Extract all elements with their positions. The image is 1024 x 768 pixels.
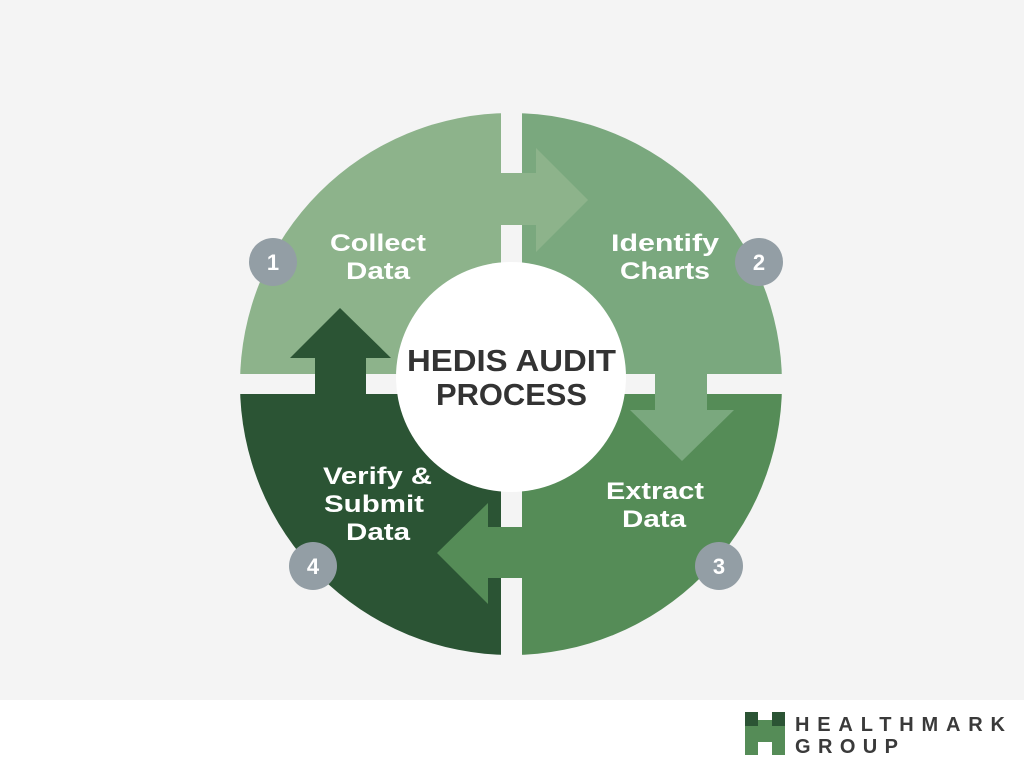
label: verify & submit: Submit bbox=[324, 491, 424, 518]
quadrant: collect data bbox=[240, 113, 511, 384]
label: verify & submit bbox=[323, 463, 432, 546]
logo: GROUP bbox=[795, 736, 898, 758]
label: identify charts: Identify bbox=[611, 230, 720, 257]
center circle bbox=[396, 262, 626, 492]
title bbox=[407, 343, 616, 412]
label: identify charts: Charts bbox=[620, 258, 710, 285]
title: HEDIS AUDIT bbox=[407, 343, 616, 378]
title: PROCESS bbox=[436, 377, 587, 412]
label: verify & submit: Verify & bbox=[323, 463, 432, 490]
label: collect data: Data bbox=[346, 258, 411, 285]
quadrant: identify charts bbox=[511, 113, 782, 384]
label: extract data bbox=[606, 478, 704, 533]
quadrant: verify & submit bbox=[240, 384, 511, 655]
quadrant: extract data bbox=[511, 384, 782, 655]
badge 2 bbox=[735, 238, 783, 286]
badge 1 bbox=[249, 238, 297, 286]
logo bbox=[745, 712, 1006, 758]
arrow: 3 to 4 bbox=[437, 503, 535, 604]
badge 4 bbox=[289, 542, 337, 590]
label: identify charts bbox=[611, 230, 720, 285]
arrow: 4 to 1 bbox=[290, 308, 391, 400]
arrow: 1 to 2 bbox=[490, 148, 588, 252]
badge 2: 2 bbox=[753, 250, 765, 275]
badge 3 bbox=[695, 542, 743, 590]
logo: HEALTHMARK bbox=[795, 714, 1006, 736]
label: extract data: Extract bbox=[606, 478, 704, 505]
arrow: 2 to 3 bbox=[630, 360, 734, 461]
label: collect data bbox=[330, 230, 426, 285]
badge 1: 1 bbox=[267, 250, 279, 275]
label: verify & submit: Data bbox=[346, 519, 411, 546]
label: extract data: Data bbox=[622, 506, 687, 533]
badge 4: 4 bbox=[307, 554, 320, 579]
badge 3: 3 bbox=[713, 554, 725, 579]
label: collect data: Collect bbox=[330, 230, 426, 257]
